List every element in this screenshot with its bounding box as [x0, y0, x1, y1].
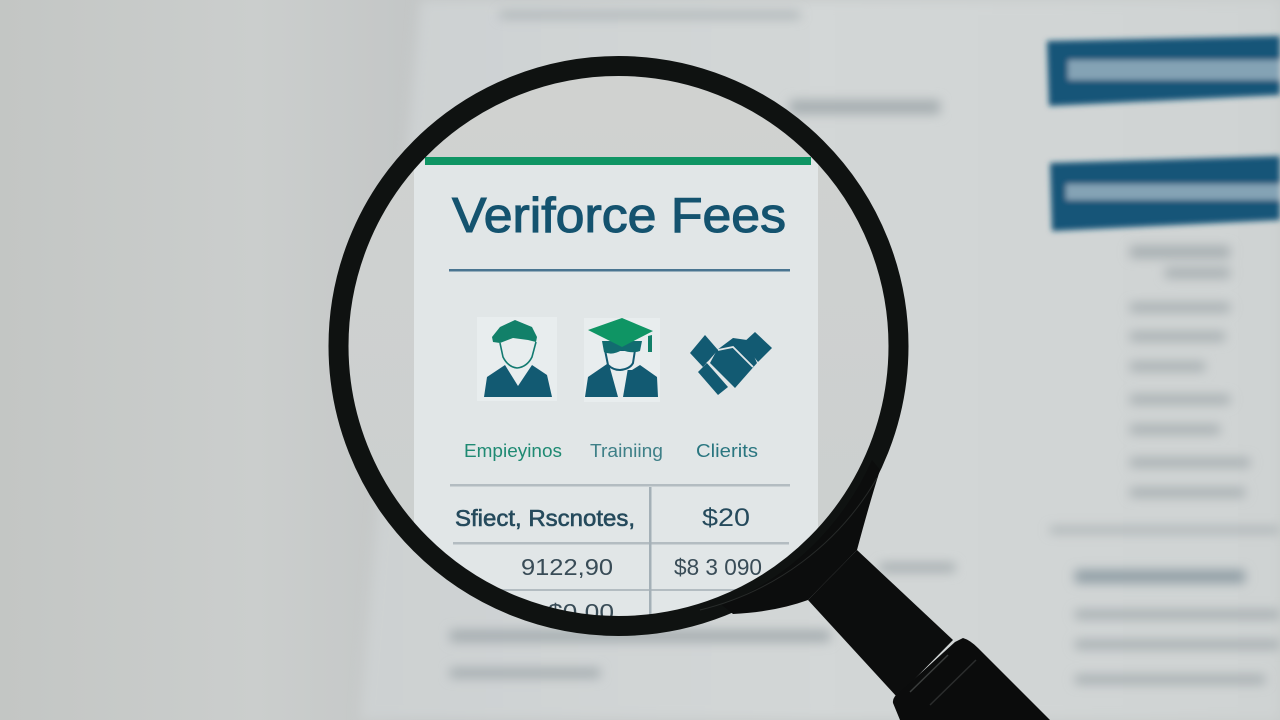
- handle collar: [893, 638, 1050, 720]
- icon: graduate: [584, 318, 660, 402]
- blurred header bar 2: [1050, 156, 1280, 231]
- icon: employee: [484, 320, 552, 397]
- title rule: [449, 269, 790, 272]
- fee table: 9122,90: [521, 554, 613, 580]
- fee table: $20: [702, 504, 750, 532]
- blurred document page: [360, 0, 1280, 720]
- card title: Veriforce Fees: [452, 189, 786, 243]
- blurred header bar 1: [1047, 36, 1280, 106]
- icon: handshake: [690, 332, 772, 395]
- magnifying glass rim: [338, 66, 898, 626]
- lens view: [358, 157, 818, 616]
- fee table: $8 3 090: [674, 554, 762, 580]
- green top bar: [425, 157, 811, 165]
- fee card: [414, 157, 818, 637]
- blurred text lines: [450, 12, 1280, 684]
- fee table: Sfiect, Rscnotes,: [455, 505, 635, 531]
- fee table: [450, 484, 790, 627]
- magnifying glass handle: [808, 550, 1050, 720]
- fee table: $0.00: [548, 599, 614, 625]
- icon labels: Empieyinos: [464, 440, 562, 461]
- icon labels: Clierits: [696, 440, 758, 461]
- icon labels: Trainiing: [590, 440, 663, 461]
- icon labels: [466, 444, 758, 461]
- rim crescent at handle joint: [722, 460, 880, 614]
